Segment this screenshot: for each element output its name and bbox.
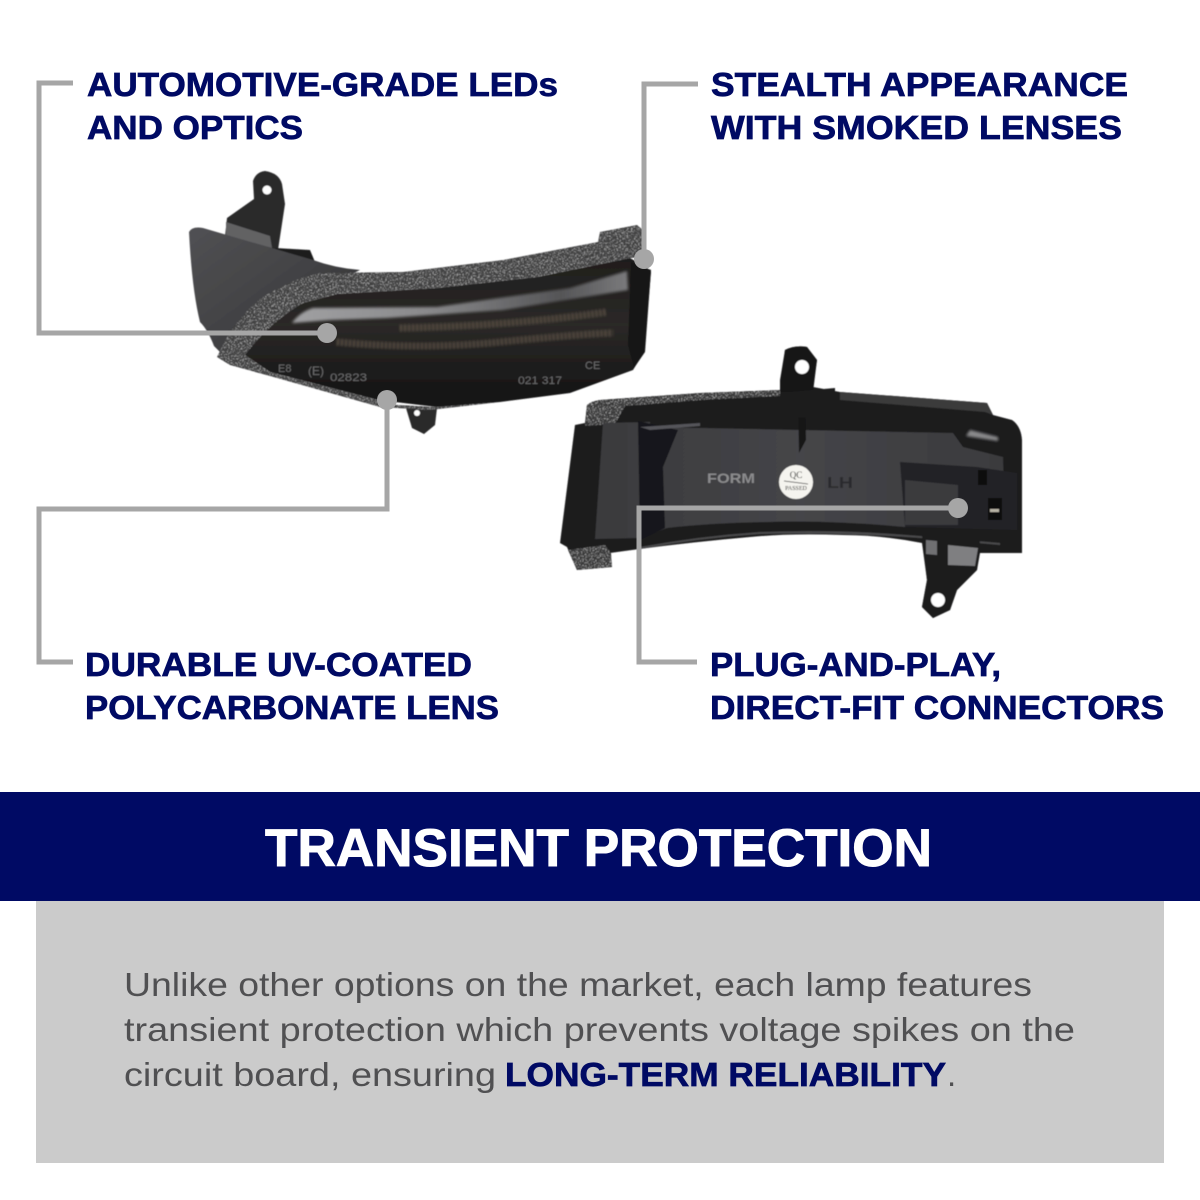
right lens edge — [628, 262, 651, 368]
text block: description: transient protection which prevents voltage spikes on the — [124, 1011, 1075, 1048]
heading: stealth appearance: WITH SMOKED LENSES — [711, 109, 1122, 146]
housing — [189, 228, 360, 352]
text block: description: LONG-TERM RELIABILITY — [505, 1056, 946, 1093]
icon: lower mounting tab — [406, 408, 437, 434]
embossed FORM label: FORM — [707, 470, 755, 486]
lamp: front view with smoked lens — [189, 171, 651, 434]
embossed LH label: LH — [827, 475, 853, 492]
heading: automotive-grade LEDs: AND OPTICS — [87, 109, 303, 146]
banner: transient protection — [0, 792, 1200, 901]
heading: automotive-grade LEDs — [87, 66, 558, 146]
icon: upper mounting tab — [225, 171, 315, 262]
lens markings: 021 317 — [518, 375, 562, 387]
heading: plug-and-play: DIRECT-FIT CONNECTORS — [710, 689, 1164, 726]
text block: description: circuit board, ensuring — [124, 1056, 496, 1093]
heading: plug-and-play — [710, 646, 1164, 726]
heading: durable lens: DURABLE UV-COATED — [85, 646, 472, 683]
lens markings — [278, 360, 600, 387]
heading: stealth appearance — [711, 66, 1128, 146]
callout line: connectors — [639, 498, 968, 662]
lamp: rear view with connector — [560, 346, 1022, 618]
banner: transient protection: TRANSIENT PROTECTION — [265, 819, 932, 878]
icon: bottom mounting tab — [922, 535, 980, 618]
callout line: LEDs and optics — [39, 83, 337, 343]
text block: description — [124, 966, 1075, 1093]
lens markings: E8 — [278, 363, 291, 375]
panel: text background — [36, 901, 1164, 1163]
text block: description: . — [947, 1056, 956, 1093]
upper foam edge — [585, 390, 780, 426]
dark recess band — [638, 421, 678, 540]
lens markings: 02823 — [330, 372, 367, 384]
heading: plug-and-play: PLUG-AND-PLAY, — [710, 646, 1001, 683]
LED optics rows — [337, 312, 613, 346]
heading: durable lens — [85, 646, 499, 726]
text block: description: Unlike other options on the market, each lamp features — [124, 966, 1032, 1003]
QC sticker — [779, 465, 813, 499]
light guide highlight — [292, 271, 628, 323]
heading: stealth appearance: STEALTH APPEARANCE — [711, 66, 1128, 103]
foam gasket — [217, 225, 643, 410]
QC sticker: PASSED — [785, 486, 808, 492]
callout line: smoked lenses — [634, 84, 698, 269]
callout line: polycarbonate lens — [39, 390, 397, 662]
heading: durable lens: POLYCARBONATE LENS — [85, 689, 499, 726]
icon: top mounting tab — [780, 346, 835, 453]
rear panel — [595, 422, 1005, 539]
rib highlights — [966, 430, 998, 441]
lower foam edge — [568, 545, 612, 570]
QC sticker: QC — [790, 470, 802, 480]
lens markings: CE — [585, 360, 600, 372]
connector housing — [900, 462, 1017, 530]
rear silhouette — [560, 346, 1022, 618]
lens — [245, 258, 651, 407]
lens markings: (E) — [308, 364, 324, 378]
heading: automotive-grade LEDs: AUTOMOTIVE-GRADE LEDs — [87, 66, 558, 103]
